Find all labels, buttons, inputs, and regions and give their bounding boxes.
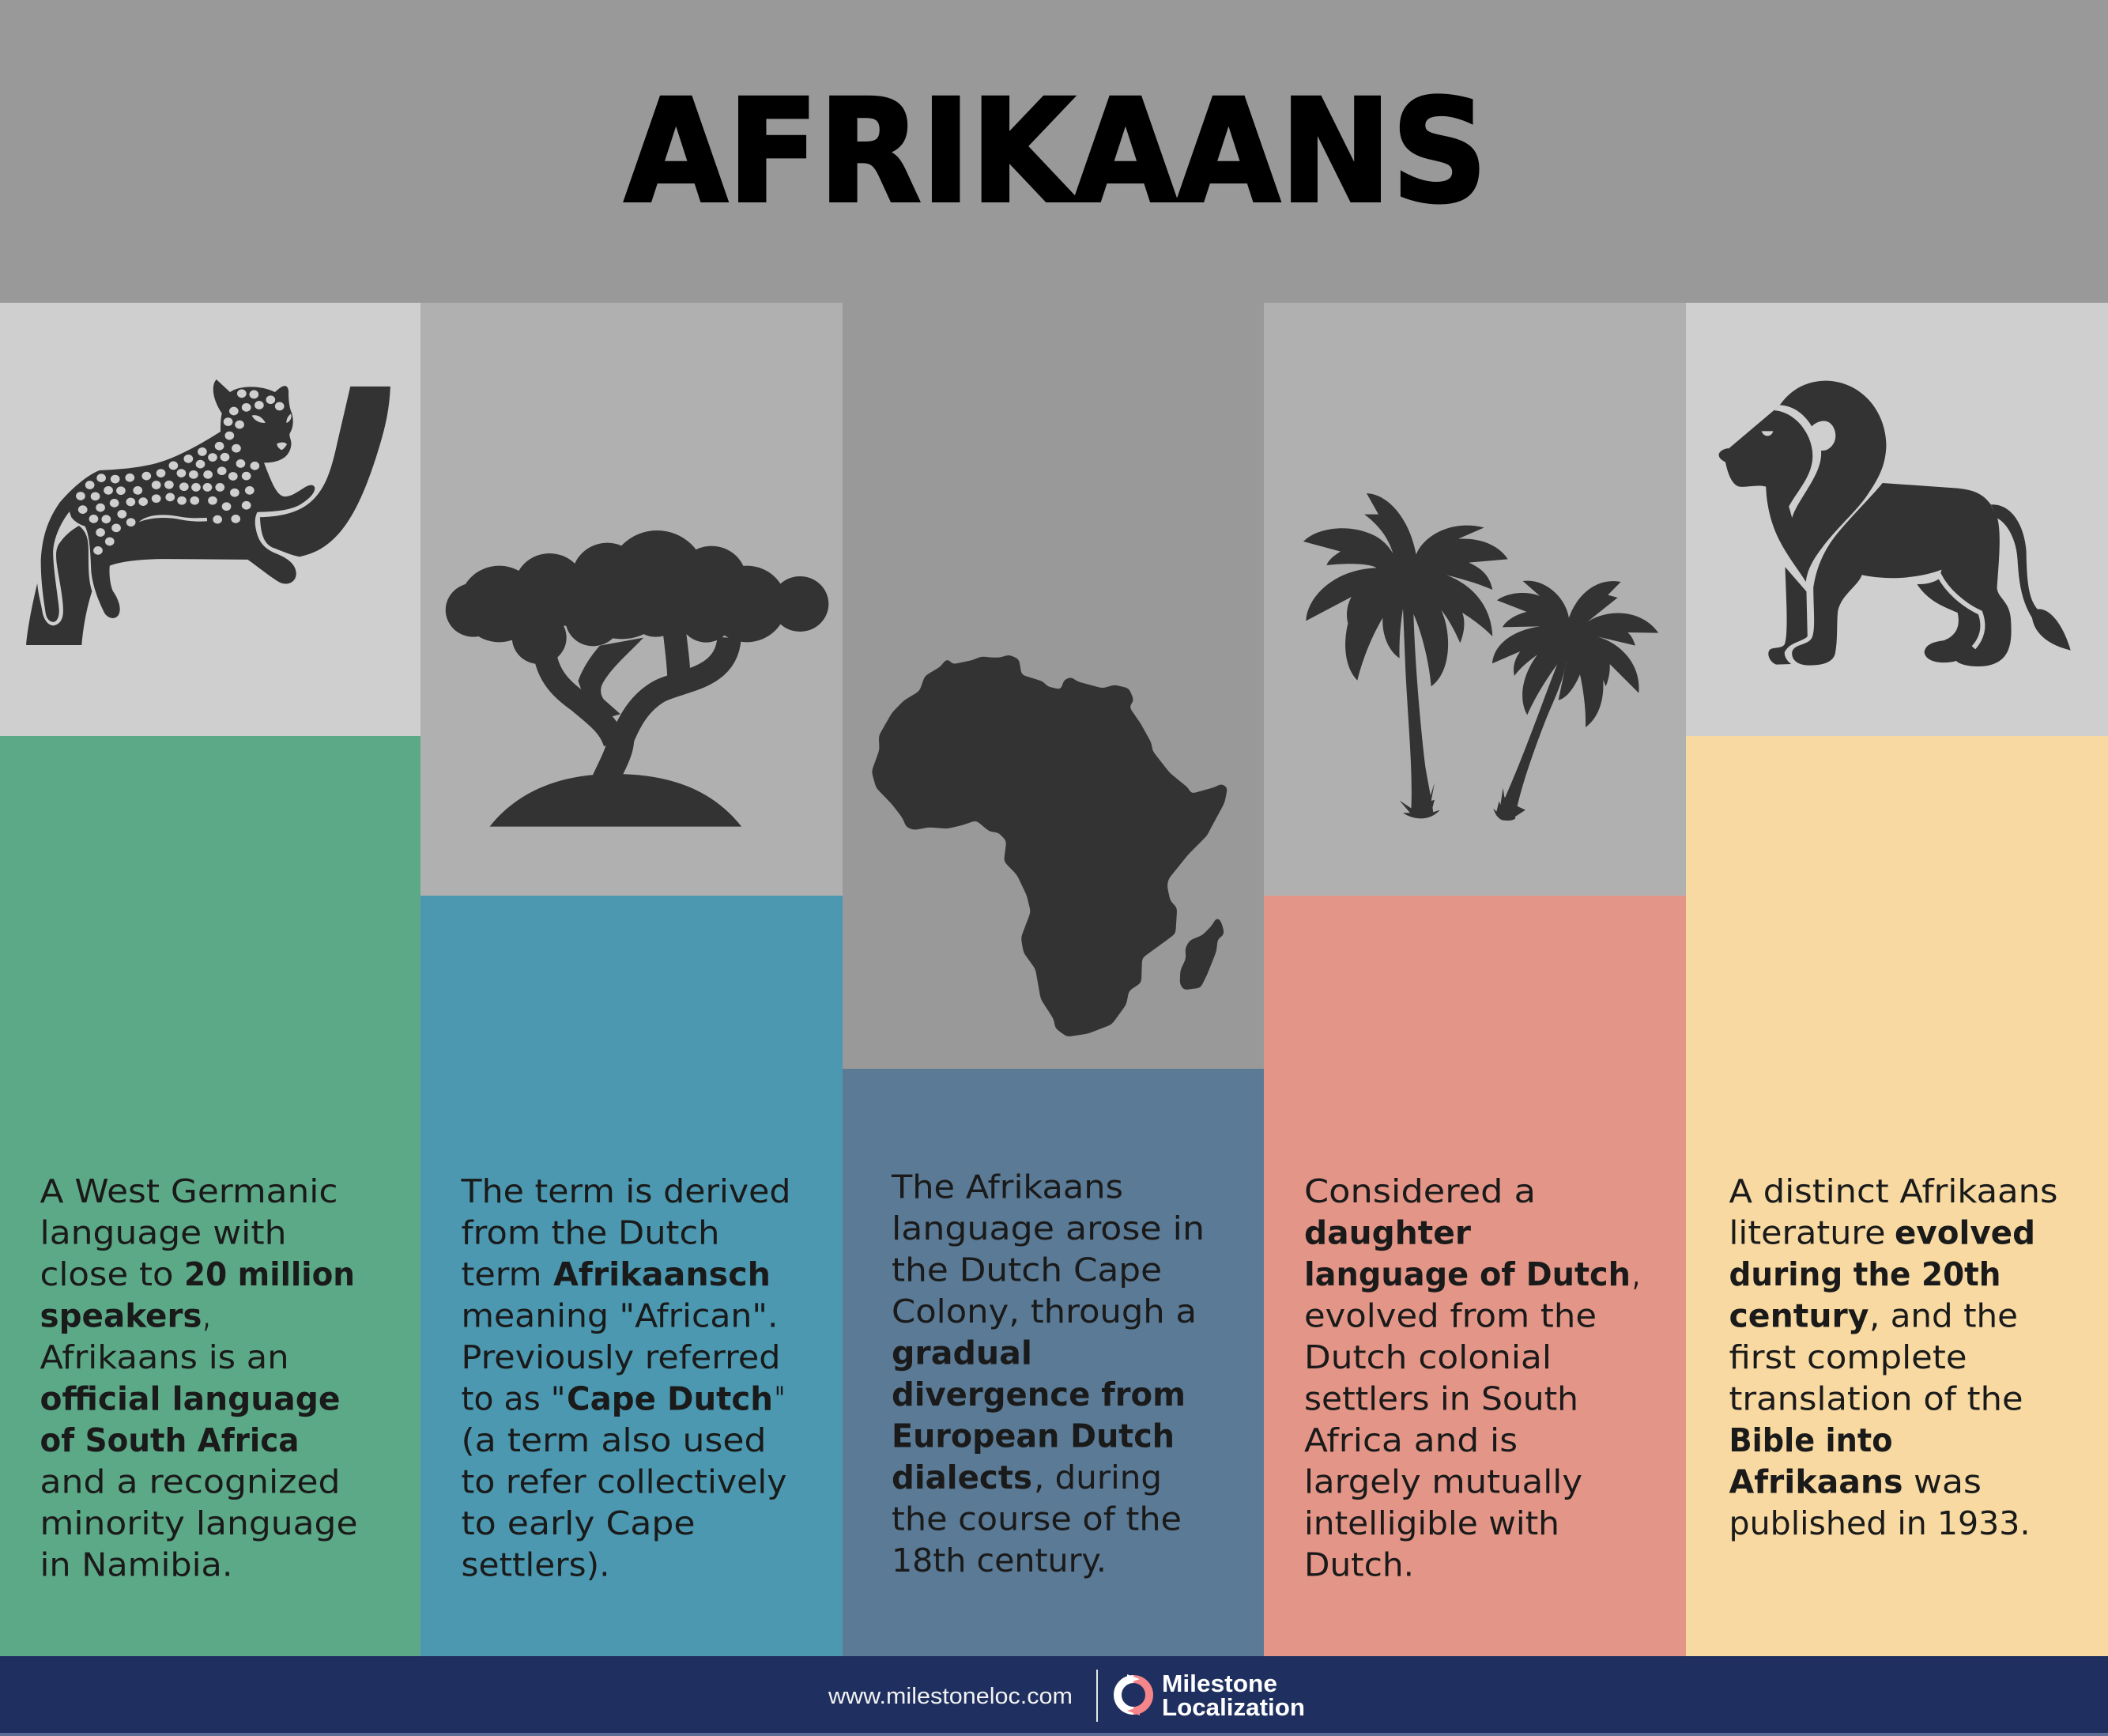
logo wordmark: Milestone <box>1162 1670 1277 1697</box>
panel: term origin <box>420 303 843 1656</box>
text: term origin: term <box>462 1255 542 1293</box>
text: literature: Afrikaans <box>1729 1462 1903 1500</box>
text: literature: was <box>1914 1462 1982 1500</box>
text: literature: first complete <box>1729 1338 1967 1376</box>
text: daughter language <box>1304 1172 1640 1584</box>
text: speakers: speakers <box>40 1296 202 1334</box>
panel: daughter language <box>1264 303 1686 1656</box>
text: literature: century <box>1729 1296 1869 1334</box>
text: term origin: Previously referred <box>462 1338 781 1376</box>
icon: lion <box>1719 381 2071 666</box>
text: history: dialects <box>892 1459 1032 1496</box>
text: literature: during the 20th <box>1729 1255 2001 1293</box>
text: speakers: , <box>203 1296 210 1334</box>
text: speakers: minority language <box>40 1504 357 1542</box>
text: term origin: Afrikaansch <box>553 1255 771 1293</box>
text: history: language arose in <box>892 1210 1205 1247</box>
text: literature: Bible into <box>1729 1421 1892 1459</box>
text: term origin: meaning "African". <box>462 1296 778 1334</box>
text: history: the course of the <box>892 1500 1182 1538</box>
title: AFRIKAANS <box>624 70 1488 235</box>
text: speakers: official language <box>40 1380 340 1418</box>
text: literature <box>1729 1172 2058 1542</box>
text: speakers: in Namibia. <box>40 1546 232 1584</box>
text: daughter language: , <box>1632 1255 1640 1293</box>
text: term origin: to as " <box>462 1380 566 1418</box>
header band <box>0 0 2108 303</box>
text: literature: evolved <box>1895 1214 2035 1252</box>
text: speakers: and a recognized <box>40 1462 340 1500</box>
text: term origin <box>460 1172 790 1584</box>
text: speakers: close to <box>40 1255 174 1293</box>
footer url: www.milestoneloc.com <box>828 1684 1073 1709</box>
text: speakers: 20 million <box>184 1255 355 1293</box>
text: term origin: to refer collectively <box>462 1462 787 1500</box>
text: literature: , and the <box>1869 1296 2018 1334</box>
text: history: gradual <box>892 1334 1032 1372</box>
icon: map of Africa <box>872 655 1227 1037</box>
text: history: the Dutch Cape <box>892 1251 1162 1289</box>
text: speakers: of South Africa <box>40 1421 299 1459</box>
text: daughter language: intelligible with <box>1304 1504 1559 1542</box>
text: speakers <box>40 1172 357 1584</box>
text: daughter language: Considered a <box>1304 1172 1536 1210</box>
text: history: 18th century. <box>892 1542 1107 1579</box>
text: term origin: " <box>775 1380 785 1418</box>
text: history: European Dutch <box>892 1417 1175 1455</box>
text: speakers: language with <box>40 1214 286 1252</box>
text: literature: literature <box>1729 1214 1886 1252</box>
text: history: Colony, through a <box>892 1293 1197 1330</box>
footer bar <box>0 1656 2108 1736</box>
icon: leopard on a branch <box>26 379 390 645</box>
text: term origin: (a term also used <box>462 1421 767 1459</box>
text: daughter language: largely mutually <box>1304 1462 1582 1500</box>
text: literature: translation of the <box>1729 1380 2023 1418</box>
text: term origin: Cape Dutch <box>567 1380 773 1418</box>
text: daughter language: language of Dutch <box>1304 1255 1631 1293</box>
text: term origin: The term is derived <box>460 1172 790 1210</box>
text: term origin: settlers). <box>462 1546 610 1584</box>
text: literature: A distinct Afrikaans <box>1729 1172 2058 1210</box>
panel: literature <box>1686 303 2108 1656</box>
text: history: divergence from <box>892 1376 1186 1413</box>
text: daughter language: daughter <box>1304 1214 1472 1252</box>
text: daughter language: settlers in South <box>1304 1380 1578 1418</box>
text: speakers: Afrikaans is an <box>40 1338 289 1376</box>
text: history: The Afrikaans <box>891 1168 1123 1206</box>
text: literature: published in 1933. <box>1729 1504 2030 1542</box>
logo wordmark <box>1162 1670 1305 1721</box>
text: daughter language: Dutch. <box>1304 1546 1414 1584</box>
text: term origin: from the Dutch <box>462 1214 719 1252</box>
text: speakers: A West Germanic <box>40 1172 338 1210</box>
logo wordmark: Localization <box>1162 1693 1305 1721</box>
text: history: , during <box>1034 1459 1162 1496</box>
text: term origin: to early Cape <box>462 1504 696 1542</box>
text: daughter language: evolved from the <box>1304 1296 1597 1334</box>
icon: two palm trees <box>1303 493 1658 821</box>
logo mark <box>1118 1674 1149 1715</box>
text: history <box>891 1168 1205 1579</box>
panel: history <box>843 303 1264 1656</box>
panel: speakers <box>0 303 420 1656</box>
text: daughter language: Africa and is <box>1304 1421 1518 1459</box>
icon: acacia tree <box>446 530 828 827</box>
text: daughter language: Dutch colonial <box>1304 1338 1552 1376</box>
